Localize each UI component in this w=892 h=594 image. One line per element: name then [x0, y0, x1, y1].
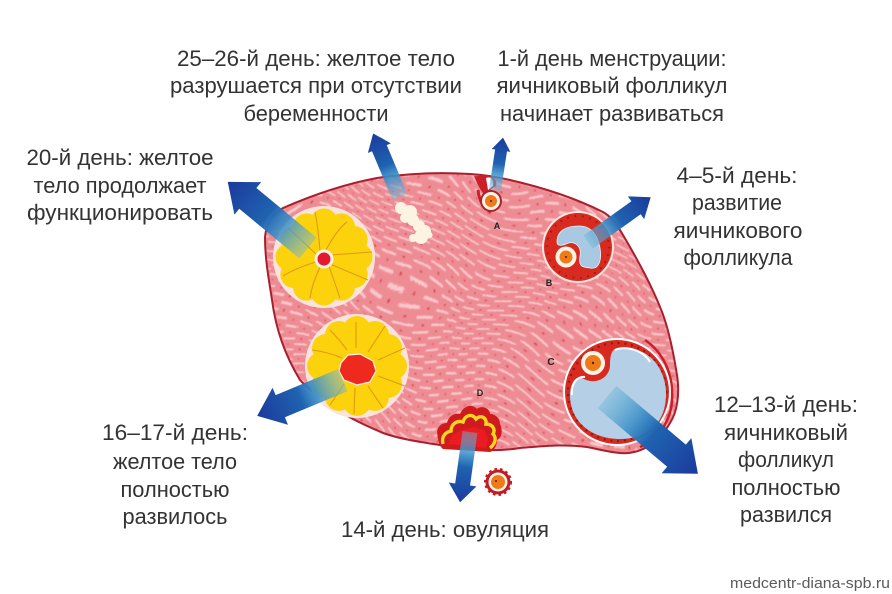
- caption: 4-5th day: [674, 163, 802, 270]
- caption: 12-13th day: 12–13-й день:: [714, 392, 858, 417]
- caption: 16-17th day: [102, 420, 248, 529]
- corpus luteum: 20th day: [273, 206, 375, 308]
- label C: C: [547, 357, 555, 368]
- caption: 12-13th day: развился: [740, 502, 832, 527]
- arrow: 20th day: [214, 166, 321, 264]
- caption: 20th day: функционировать: [27, 200, 213, 225]
- arrow: 25-26th day: [362, 129, 412, 202]
- ovary outline: [265, 173, 678, 453]
- caption: 20th day: [26, 145, 214, 225]
- caption: 12-13th day: [714, 392, 858, 527]
- source watermark: medcentr-diana-spb.ru: [730, 575, 890, 592]
- corpus luteum: 16-17th day: [305, 314, 409, 418]
- caption: 1st day: начинает развиваться: [500, 101, 724, 126]
- caption: 14th day: 14-й день: овуляция: [341, 517, 549, 542]
- caption: 4-5th day: фолликула: [684, 245, 793, 270]
- released ovum: [486, 470, 510, 494]
- caption: 1st day: яичниковый фолликул: [496, 73, 728, 98]
- caption: 12-13th day: полностью: [732, 475, 840, 500]
- caption: 12-13th day: фолликул: [738, 447, 834, 472]
- caption: 20th day: 20-й день: желтое: [26, 145, 214, 170]
- caption: 12-13th day: яичниковый: [724, 420, 848, 445]
- caption: 20th day: тело продолжает: [34, 173, 206, 198]
- label A: A: [494, 221, 501, 231]
- follicle C: mature: [547, 338, 672, 447]
- ruptured follicle D: ovulation: [437, 388, 502, 452]
- corpus albicans remnant: [395, 202, 432, 244]
- caption: 4-5th day: 4–5-й день:: [676, 163, 798, 188]
- follicle B: developing: [542, 211, 614, 288]
- caption: 16-17th day: желтое тело: [113, 449, 237, 474]
- ovary stroma tissue: [266, 174, 678, 452]
- caption: 1st day: [496, 46, 728, 126]
- follicle A: primordial: [474, 175, 502, 231]
- caption: 1st day: 1-й день менструации:: [498, 46, 726, 71]
- caption: 25-26th day: 25–26-й день: желтое тело: [177, 46, 455, 71]
- caption: 25-26th day: разрушается при отсутствии: [170, 73, 462, 98]
- caption: 4-5th day: развитие: [692, 190, 782, 215]
- arrow: 12-13th day: [592, 379, 713, 491]
- caption: 25-26th day: [170, 46, 462, 126]
- caption: 16-17th day: полностью: [120, 477, 230, 502]
- ovary cross-section: [264, 172, 680, 454]
- caption: 16-17th day: развилось: [122, 504, 228, 529]
- arrow: 14th day: [446, 430, 484, 504]
- label D: D: [477, 388, 484, 398]
- arrow: 16-17th day: [249, 362, 351, 434]
- caption: 25-26th day: беременности: [244, 101, 388, 126]
- caption: 16-17th day: 16–17-й день:: [102, 420, 248, 445]
- label B: B: [546, 278, 553, 288]
- arrow: 1st day: [486, 136, 512, 191]
- caption: 4-5th day: яичникового: [674, 218, 802, 243]
- arrow: 4-5th day: [580, 186, 659, 253]
